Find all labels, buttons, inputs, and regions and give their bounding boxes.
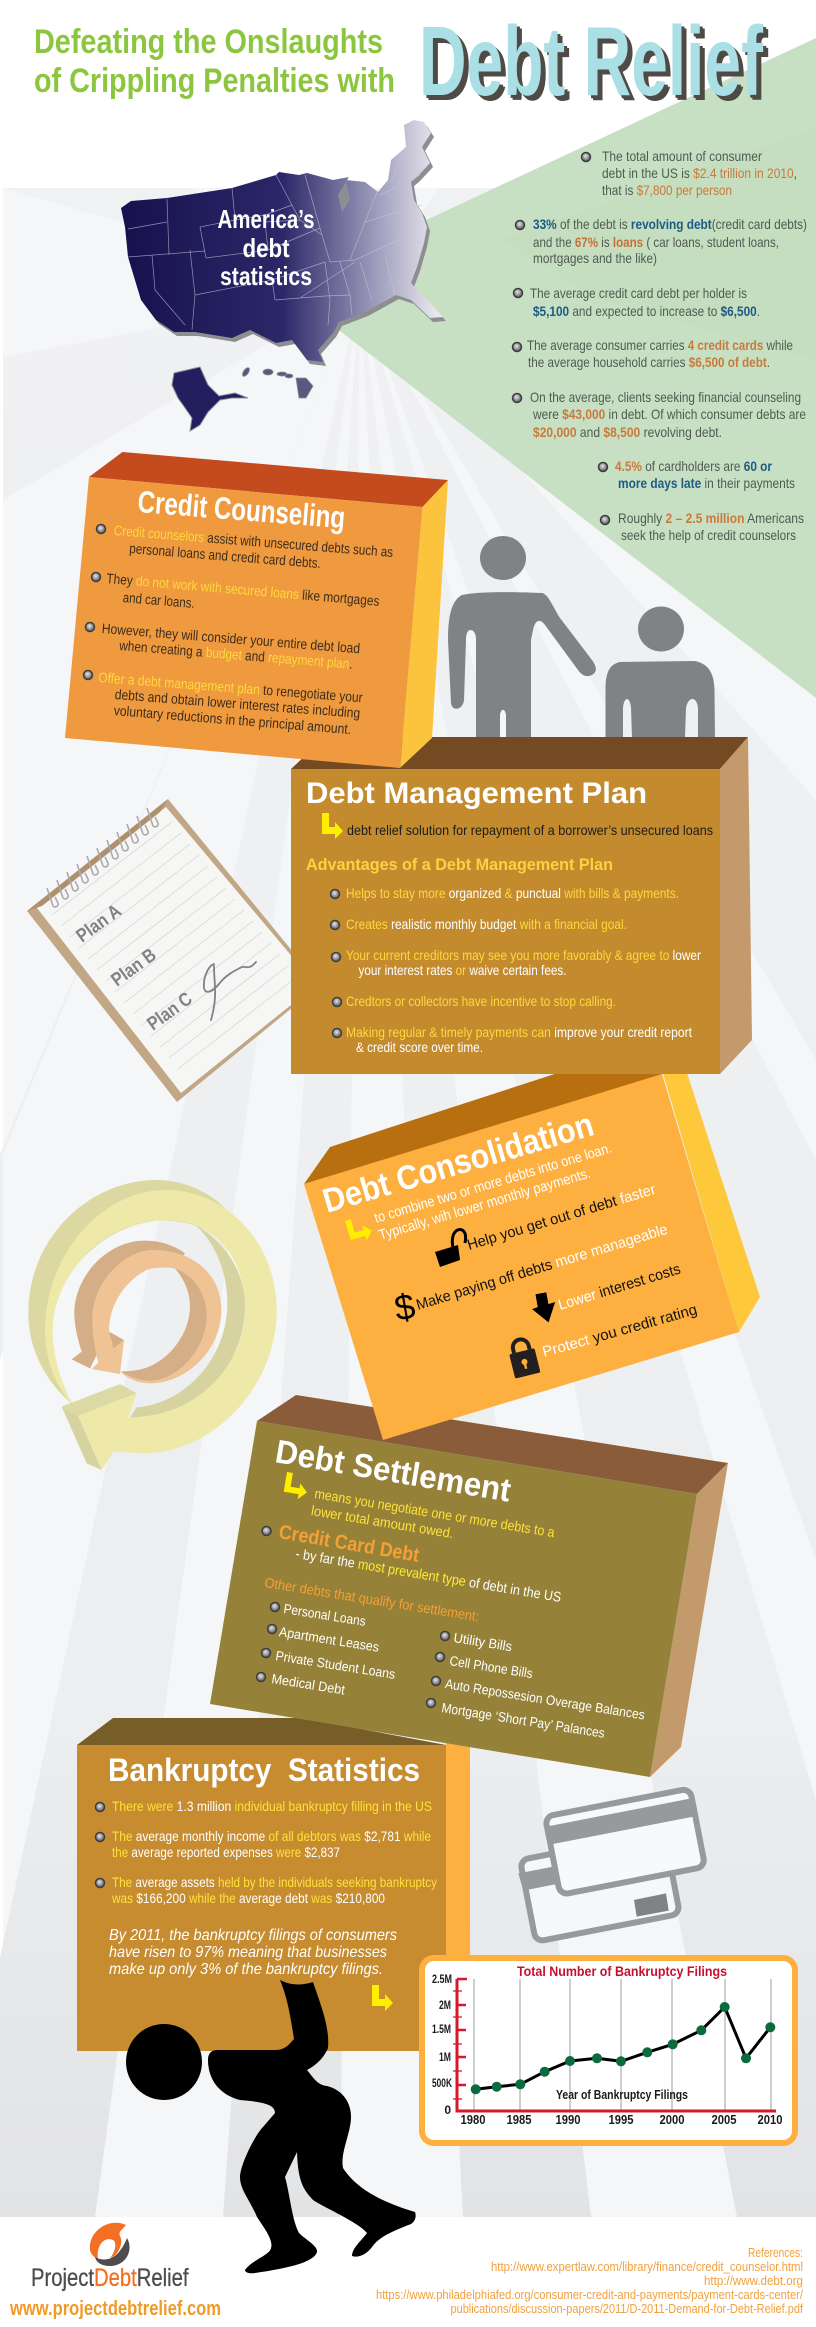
statistic: total debt: The total amount of consumer	[602, 148, 762, 164]
plan labels: Plan C	[144, 989, 197, 1035]
box top face	[291, 737, 748, 769]
references: References:	[748, 2246, 803, 2260]
panel: debt settlement	[210, 1395, 728, 1777]
italic statement	[109, 1927, 397, 1978]
plan labels: Plan A	[73, 901, 126, 947]
logo mark	[90, 2223, 130, 2266]
darker green band	[500, 128, 816, 360]
x axis labels: 2005	[712, 2112, 736, 2127]
map: label: America’s	[218, 204, 314, 234]
bullet: income and expenses	[96, 1828, 431, 1860]
bullet: assets and debt	[96, 1874, 437, 1906]
icon: dollar sign: $	[391, 1285, 418, 1329]
panel: green statistics wedge	[283, 38, 816, 698]
advantage 5: & credit score over time.	[356, 1039, 483, 1055]
box front face	[210, 1421, 697, 1777]
front card	[545, 1788, 705, 1895]
statistic: revolving debt: and the 67% is loans ( car loans, student loans,	[533, 234, 779, 250]
point 3: when creating a budget and repayment plan.	[118, 637, 353, 672]
inner arrow	[72, 1241, 221, 1383]
panel: debt consolidation	[304, 1070, 760, 1440]
notepad backing	[27, 799, 320, 1102]
chart frame	[422, 1958, 795, 2143]
definition text: lower total amount owed.	[310, 1502, 455, 1541]
icon: two people	[448, 536, 715, 738]
heading: debt management plan: Debt Management Plan	[306, 777, 647, 810]
y axis labels: 2M	[439, 1998, 451, 2012]
title: first lines: of Crippling Penalties with	[34, 62, 395, 100]
map: label: debt	[242, 233, 290, 263]
statistic: credit cards: The average consumer carries 4 credit cards while	[527, 337, 793, 353]
box front face	[65, 477, 422, 768]
statistic: revolving debt	[516, 216, 807, 266]
x axis labels: 1985	[506, 2112, 532, 2127]
website: www.projectdebtrelief.com	[9, 2298, 221, 2320]
grid lines	[474, 1979, 771, 2110]
point 2: They do not work with secured loans like mortgages	[106, 570, 380, 609]
bullet: assets and debt: The average assets held by the individuals seeking bankruptcy	[112, 1874, 437, 1890]
definition: debt relief solution for repayment of a borrower’s unsecured loans	[347, 822, 713, 838]
box right face	[662, 1070, 760, 1332]
bullet: assets and debt: was $166,200 while the average debt was $210,800	[111, 1890, 385, 1906]
point 4: Offer a debt management plan to renegotiate your	[98, 669, 363, 705]
box right face	[400, 480, 448, 768]
definition text: to combine two or more debts into one loan.	[373, 1141, 614, 1227]
statistic: late payments: more days late in their payments	[618, 475, 795, 491]
notepad paper	[37, 807, 316, 1093]
arrow	[345, 1214, 374, 1245]
icon: open padlock	[435, 1230, 466, 1267]
panel: credit counseling	[65, 452, 448, 768]
person head	[126, 2024, 202, 2100]
title: first lines	[34, 23, 395, 100]
point 3: However, they will consider your entire debt load	[101, 620, 361, 656]
statistic: revolving debt: mortgages and the like)	[533, 250, 657, 266]
panel: debt management plan	[291, 737, 752, 1074]
advantage 3	[332, 947, 701, 978]
icon: person carrying the box	[126, 1980, 416, 2273]
map: mainland	[121, 120, 446, 366]
heading: credit counseling: Credit Counseling	[136, 484, 347, 535]
chart: total number of bankruptcy filings	[422, 1958, 795, 2143]
point 4: debts and obtain lower interest rates including	[114, 686, 361, 721]
italic statement: By 2011, the bankruptcy filings of consumers	[109, 1927, 397, 1944]
advantage list	[330, 885, 701, 1055]
statistic: average card debt	[514, 285, 760, 319]
heading: debt settlement: Debt Settlement	[273, 1432, 514, 1509]
list: left column: Apartment Leases	[278, 1624, 380, 1655]
signature	[204, 962, 256, 1020]
box top face	[257, 1395, 728, 1494]
statistic: late payments: 4.5% of cardholders are 60 or	[615, 458, 772, 474]
list: left column: Private Student Loans	[275, 1648, 397, 1682]
y axis labels	[432, 1972, 452, 2117]
subheading: advantages: Advantages of a Debt Management Plan	[306, 855, 613, 874]
spiral binding band	[27, 799, 168, 911]
list: right column: Cell Phone Bills	[449, 1653, 534, 1681]
list: right column	[426, 1630, 646, 1741]
statistic: counseling clients: $20,000 and $8,500 revolving debt.	[533, 424, 722, 440]
point 2: and car loans.	[122, 589, 195, 611]
x axis labels: 1990	[556, 2112, 580, 2127]
adult figure	[448, 536, 596, 738]
map: Alaska	[172, 367, 248, 431]
credit card debt	[262, 1521, 563, 1605]
benefit: faster: Help you get out of debt faster	[465, 1181, 658, 1254]
benefit: credit rating: Protect you credit rating	[540, 1301, 699, 1361]
logo wordmark: ProjectDebtRelief	[31, 2264, 189, 2292]
statistic: counselor seekers	[600, 510, 804, 543]
footer	[0, 2217, 816, 2327]
x axis labels: 1980	[460, 2112, 486, 2127]
point 3	[86, 620, 361, 672]
box front face	[304, 1074, 739, 1440]
plan labels: Plan B	[108, 945, 160, 991]
italic statement: have risen to 97% meaning that businesses	[109, 1944, 387, 1961]
map: label	[218, 204, 314, 291]
outer arrow	[28, 1180, 277, 1470]
counseling list	[84, 522, 394, 737]
child figure	[606, 606, 715, 738]
y axis labels: 1.5M	[432, 2022, 451, 2036]
back card	[518, 1832, 680, 1942]
benefit: manageable: Make paying off debts more manageable	[414, 1221, 670, 1314]
statistic: credit cards: the average household carries $6,500 of debt.	[528, 354, 770, 370]
x axis labels: 1995	[608, 2112, 634, 2127]
bullet: filings: There were 1.3 million individual bankruptcy filling in the US	[112, 1798, 432, 1814]
arrow	[283, 1472, 310, 1500]
references	[376, 2246, 803, 2316]
statistic: revolving debt: 33% of the debt is revolving debt(credit card debts)	[533, 216, 807, 232]
list: right column: Utility Bills	[453, 1630, 513, 1654]
icon: closed padlock	[506, 1336, 540, 1379]
advantage 5: Making regular & timely payments can improve your credit report	[346, 1024, 692, 1040]
statistic: credit cards	[512, 337, 793, 370]
statistic: late payments	[598, 458, 795, 491]
point 1: Credit counselors assist with unsecured debts such as	[113, 522, 394, 560]
bullet: income and expenses: the average reported expenses were $2,837	[112, 1844, 340, 1860]
icon: down arrow	[530, 1291, 558, 1325]
icon: notepad	[27, 799, 320, 1102]
advantage 3: your interest rates or waive certain fees.	[358, 962, 566, 978]
list: left column	[256, 1601, 397, 1698]
person body	[208, 1980, 416, 2273]
references: http://www.debt.org	[704, 2274, 803, 2288]
statistic: counselor seekers: Roughly 2 – 2.5 million Americans	[618, 510, 804, 526]
y axis labels: 0	[444, 2103, 451, 2117]
y axis labels: 1M	[439, 2050, 451, 2064]
panel: bankruptcy statistics	[77, 1700, 470, 2051]
bullet: income and expenses: The average monthly income of all debtors was $2,781 while	[112, 1828, 431, 1844]
axes	[453, 1979, 776, 2111]
arrow to chart	[372, 1985, 393, 2011]
list: left column: Personal Loans	[283, 1601, 367, 1629]
advantage 4: Credtors or collectors have incentive to stop calling.	[346, 993, 616, 1009]
arrow	[322, 813, 343, 839]
heading: bankruptcy statistics: Bankruptcy Statistics	[108, 1752, 420, 1788]
y axis labels: 2.5M	[432, 1972, 452, 1986]
list: left column: Medical Debt	[271, 1671, 346, 1698]
x axis labels: 2000	[660, 2112, 684, 2127]
icon: credit cards	[518, 1788, 705, 1942]
statistics bullet list	[512, 148, 807, 543]
point 4	[84, 669, 363, 737]
statistic: counseling clients	[512, 389, 806, 440]
y axis labels: 500K	[432, 2076, 452, 2090]
italic statement: make up only 3% of the bankruptcy filings.	[109, 1961, 383, 1978]
box top face	[89, 452, 448, 507]
statistic: average card debt: The average credit card debt per holder is	[530, 285, 747, 301]
map: Hawaii	[241, 366, 313, 398]
statistic: average card debt: $5,100 and expected to increase to $6,500.	[533, 303, 760, 319]
title	[34, 6, 768, 121]
list: right column: Auto Repossesion Overage Balances	[444, 1676, 646, 1723]
definition text: means you negotiate one or more debts to a	[314, 1485, 556, 1540]
x axis labels	[460, 2112, 782, 2127]
list: right column: Mortgage ‘Short Pay’ Palances	[441, 1700, 606, 1741]
box front face	[77, 1745, 446, 2051]
credit card debt: Credit Card Debt	[277, 1521, 421, 1567]
statistic: total debt	[582, 148, 797, 198]
point 4: voluntary reductions in the principal amount.	[113, 702, 352, 737]
statistic: total debt: debt in the US is $2.4 trillion in 2010,	[602, 165, 797, 181]
icon: circular arrows	[28, 1180, 277, 1470]
box top face	[77, 1718, 446, 1745]
map: label: statistics	[220, 261, 312, 291]
advantage 3: Your current creditors may see you more favorably & agree to lower	[346, 947, 701, 963]
box right face	[446, 1700, 470, 1970]
map of the United States	[121, 120, 446, 431]
x axis labels: 2010	[758, 2112, 782, 2127]
ruled lines	[52, 822, 298, 1069]
box top face	[304, 1070, 662, 1184]
point 1: personal loans and credit card debts.	[129, 540, 321, 571]
advantage 1: Helps to stay more organized & punctual with bills & payments.	[346, 885, 679, 901]
title: first lines: Defeating the Onslaughts	[34, 23, 383, 61]
data points	[471, 2002, 775, 2094]
box right face	[720, 737, 752, 1074]
data line	[476, 2007, 770, 2089]
x axis title: Year of Bankruptcy Filings	[556, 2088, 688, 2102]
advantage 5	[332, 1024, 692, 1055]
spiral rings	[47, 808, 158, 907]
other debts heading: Other debts that qualify for settlement:	[264, 1574, 480, 1624]
footer background	[0, 2217, 816, 2327]
benefit: lower interest: Lower interest costs	[556, 1261, 683, 1314]
plan labels	[73, 901, 197, 1035]
statistic: total debt: that is $7,800 per person	[602, 182, 732, 198]
definition text: Typically, wih lower monthly payments.	[377, 1166, 592, 1244]
heading: debt consolidation: Debt Consolidation	[319, 1106, 598, 1221]
box front face	[291, 769, 720, 1074]
credit card debt: - by far the most prevalent type of debt in the US	[295, 1545, 563, 1605]
advantage 2: Creates realistic monthly budget with a financial goal.	[346, 916, 627, 932]
chart title: Total Number of Bankruptcy Filings	[517, 1963, 727, 1979]
box right face	[650, 1463, 728, 1777]
